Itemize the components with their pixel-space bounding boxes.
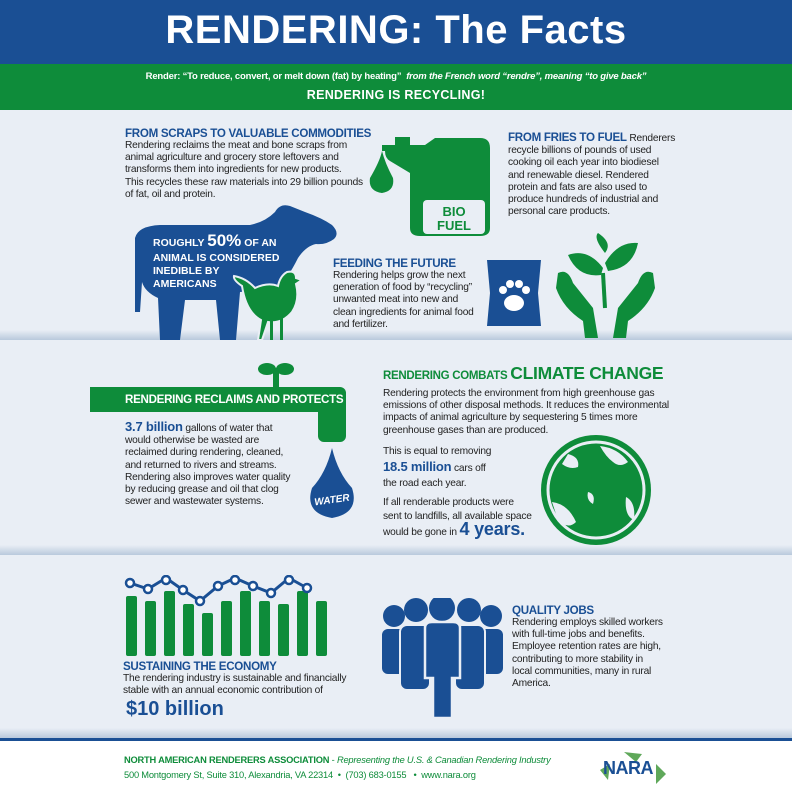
text: from scraps: This recycles these raw materials into 29 billion pounds — [125, 177, 363, 188]
logo: NARA — [600, 752, 666, 784]
recycling subhead: RENDERING IS RECYCLING! — [307, 88, 485, 102]
section 1 background — [0, 110, 792, 340]
text: landfills: If all renderable products were — [383, 497, 514, 508]
icon: biofuel can: FUEL — [437, 218, 471, 233]
text: from scraps: of fat, oil and protein. — [125, 189, 215, 200]
text: quality jobs: Rendering employs skilled workers — [512, 617, 663, 628]
text: from scraps: Rendering reclaims the meat and bone scraps from — [125, 140, 347, 151]
icon: hands with plant — [556, 233, 655, 338]
text: fries to fuel: and renewable diesel. Rendered — [508, 170, 649, 181]
text: from scraps: animal agriculture and grocery store leftovers and — [125, 152, 339, 163]
icon: water drop — [310, 448, 354, 518]
text: sustaining the economy — [123, 660, 346, 720]
text: fries to fuel: produce hundreds of industrial and — [508, 194, 658, 205]
text: water facts: would otherwise be wasted are — [125, 435, 259, 446]
definition text: Render: “To reduce, convert, or melt down (fat) by heating” from the French word “rendre”, meaning “to give back” — [146, 71, 646, 82]
text: water facts: Rendering also improves water quality — [125, 472, 290, 483]
icon: cow and chicken: INEDIBLE BY — [153, 265, 220, 277]
text: feeding the future: and fertilizer. — [333, 319, 388, 330]
text: landfills: would be gone in 4 years. — [383, 519, 525, 539]
text: from scraps: FROM SCRAPS TO VALUABLE COMMODITIES — [125, 127, 371, 140]
text: feeding the future: Rendering helps grow the next — [333, 270, 465, 281]
text: quality jobs: QUALITY JOBS — [512, 604, 594, 617]
text: fries to fuel: protein and fats are also used to — [508, 182, 647, 193]
text: sustaining the economy: SUSTAINING THE ECONOMY — [123, 660, 277, 673]
header — [0, 0, 792, 64]
icon: water drop: WATER — [314, 492, 351, 508]
footer text: 500 Montgomery St, Suite 310, Alexandria, VA 22314 • (703) 683-0155 • www.nara.org — [124, 770, 476, 780]
section 3 background — [0, 555, 792, 735]
heading: climate change: RENDERING COMBATS CLIMATE CHANGE — [383, 363, 663, 383]
text: water facts: by reducing grease and oil that clog — [125, 484, 279, 495]
text: quality jobs: with full-time jobs and benefits. — [512, 629, 645, 640]
text: climate — [383, 388, 669, 436]
text: feeding the future: clean ingredients for animal food — [333, 307, 474, 318]
text: quality jobs — [512, 604, 663, 689]
icon: cow and chicken — [135, 205, 337, 340]
text: water facts: sewer and wastewater systems. — [125, 496, 264, 507]
text: fries to fuel — [508, 131, 675, 217]
text: fries to fuel: cooking oil each year into biodiesel — [508, 157, 659, 168]
icon: globe — [541, 435, 651, 545]
banner: rendering reclaims and protects (pipe) — [90, 387, 346, 442]
text: climate: impacts of animal agriculture by sequestering 5 times more — [383, 412, 638, 423]
text: quality jobs: Employee retention rates are high, — [512, 641, 661, 652]
text: water facts: reclaimed during rendering, cleaned, — [125, 447, 283, 458]
text: from scraps — [125, 127, 371, 200]
text: quality jobs: contributing to more stability in — [512, 654, 643, 665]
text: climate: emissions of other disposal methods. It reduces the environmental — [383, 400, 669, 411]
title: RENDERING: The Facts — [165, 8, 627, 52]
text: feeding the future: generation of food by “recycling” — [333, 282, 472, 293]
text: fries to fuel: personal care products. — [508, 206, 610, 217]
text: sustaining the economy: The rendering industry is sustainable and financially — [123, 673, 346, 684]
icon: cow and chicken: ANIMAL IS CONSIDERED — [153, 252, 280, 264]
logo: NARA: NARA — [603, 758, 653, 778]
footer text: NORTH AMERICAN RENDERERS ASSOCIATION - Representing the U.S. & Canadian Rendering Industry — [124, 755, 551, 765]
text: water facts: and returned to rivers and streams. — [125, 460, 277, 471]
text: cars — [383, 446, 491, 489]
icon: people — [382, 598, 503, 717]
text: quality jobs: local communities, many in rural — [512, 666, 651, 677]
cow text: ROUGHLY 50% OF AN — [153, 231, 276, 250]
text: quality jobs: America. — [512, 678, 551, 689]
text: feeding the future: FEEDING THE FUTURE — [333, 257, 456, 270]
banner: rendering reclaims and protects (pipe): RENDERING RECLAIMS AND PROTECTS — [125, 393, 343, 406]
text: feeding the future — [333, 257, 474, 330]
text: landfills: sent to landfills, all available space — [383, 510, 532, 522]
chart: economy bars and line — [124, 575, 327, 656]
icon: biofuel can — [370, 137, 490, 236]
text: feeding the future: unwanted meat into new and — [333, 294, 458, 305]
text: water facts — [125, 419, 290, 507]
text: landfills — [383, 497, 532, 539]
text: fries to fuel: FROM FRIES TO FUEL Renderers — [508, 131, 675, 144]
text: sustaining the economy: stable with an annual economic contribution of — [123, 685, 323, 696]
biofuel label: BIO — [442, 204, 466, 219]
text: fries to fuel: recycle billions of pounds of used — [508, 145, 651, 156]
icon: sprout — [258, 363, 294, 387]
text: climate: greenhouse gases than are produced. — [383, 425, 548, 436]
text: cars: This is equal to removing — [383, 446, 491, 457]
footer text — [124, 755, 552, 780]
section 2 background — [0, 340, 792, 555]
text: from scraps: transforms them into ingredients for new products. — [125, 164, 342, 175]
text: climate: Rendering protects the environment from high greenhouse gas — [383, 388, 654, 399]
green definition band — [0, 64, 792, 110]
text: cars: the road each year. — [383, 478, 466, 489]
text: water facts: 3.7 billion gallons of water that — [125, 419, 272, 434]
text: cars: 18.5 million cars off — [383, 459, 486, 474]
text: sustaining the economy: $10 billion — [126, 698, 224, 720]
icon: cow and chicken: AMERICANS — [153, 278, 217, 290]
icon: pet food bag — [487, 260, 541, 326]
